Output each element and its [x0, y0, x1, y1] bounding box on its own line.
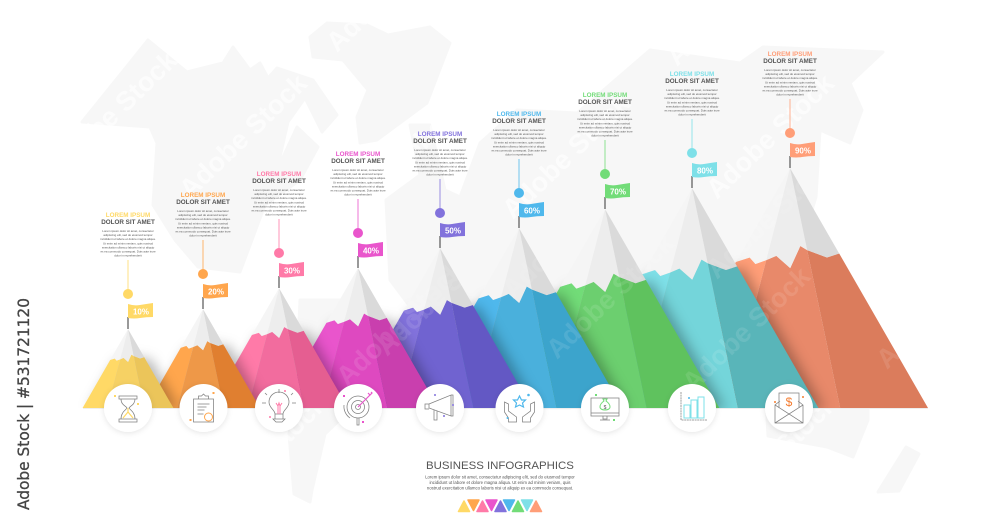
watermarks on background: Adobe Stock [703, 387, 844, 524]
text 60%: incididunt ut labore et dolore magna aliqua. [491, 136, 547, 140]
text 90%: ex ea commodo consequat. Duis aute irure [762, 88, 818, 92]
flag 90%: 90% [795, 146, 811, 156]
pin 70% [600, 140, 610, 179]
text 60%: DOLOR SIT AMET [492, 118, 546, 125]
text 40%: LOREM IPSUM [336, 151, 380, 158]
text 20%: LOREM IPSUM [181, 192, 225, 199]
text 20% [175, 192, 231, 238]
text 90%: Lorem ipsum dolor sit amet, consectetur [764, 68, 816, 72]
text 50%: incididunt ut labore et dolore magna aliqua. [412, 156, 468, 160]
mountain 40% [297, 268, 437, 408]
text 20%: adipiscing elit, sed do eiusmod tempor [178, 213, 228, 217]
faint watermarks over mountains: Adobe Stock [330, 254, 471, 391]
step 10% [100, 212, 156, 329]
watermarks on background: Adobe Stock [43, 44, 184, 181]
text 80%: incididunt ut labore et dolore magna aliqua. [664, 96, 720, 100]
text 70%: LOREM IPSUM [583, 92, 627, 99]
faint watermarks over mountains: Adobe Stock [700, 147, 841, 284]
flag 20%: 20% [208, 288, 224, 296]
step 30% [251, 171, 307, 288]
text 20%: dolor in reprehenderit [189, 234, 217, 238]
text 30%: Lorem ipsum dolor sit amet, consectetur [253, 188, 305, 192]
text 50%: Lorem ipsum dolor sit amet, consectetur [414, 148, 466, 152]
text 20%: DOLOR SIT AMET [176, 199, 230, 206]
text 50%: DOLOR SIT AMET [413, 138, 467, 145]
text 90%: exercitation ullamco laboris nisi ut aliquip [764, 84, 817, 88]
text 70%: Lorem ipsum dolor sit amet, consectetur [579, 109, 631, 113]
mountain 60% [458, 228, 630, 408]
text 40%: incididunt ut labore et dolore magna aliqua. [330, 176, 386, 180]
text 10%: ex ea commodo consequat. Duis aute irure [100, 250, 156, 254]
text 50%: ex ea commodo consequat. Duis aute irure [412, 168, 468, 172]
icon: envelope with dollar [765, 384, 813, 432]
text 40%: dolor in reprehenderit [344, 193, 372, 197]
text 70%: adipiscing elit, sed do eiusmod tempor [580, 113, 630, 117]
text 80%: Ut enim ad minim veniam, quis nostrud [667, 100, 717, 104]
text 40% [330, 151, 386, 197]
pin 80% [687, 119, 697, 158]
text 30%: DOLOR SIT AMET [252, 178, 306, 185]
text 70%: DOLOR SIT AMET [578, 99, 632, 106]
faint watermarks over mountains: Adobe Stock [540, 227, 681, 364]
mountain 20% [146, 309, 260, 408]
description: Lorem ipsum dolor sit amet, consectetur adipiscing elit, sed do eiusmod tempor [425, 474, 575, 480]
text 40%: ex ea commodo consequat. Duis aute irure [330, 188, 386, 192]
watermarks on background: Adobe Stock [370, 54, 511, 191]
text 10%: incididunt ut labore et dolore magna aliqua. [100, 237, 156, 241]
faint watermarks over mountains: Adobe Stock [206, 214, 347, 351]
text 20%: Ut enim ad minim veniam, quis nostrud [178, 221, 228, 225]
flag 70%: 70% [610, 188, 626, 196]
text 20%: incididunt ut labore et dolore magna aliqua. [175, 217, 231, 221]
pin 90% [785, 99, 795, 138]
text 30%: ex ea commodo consequat. Duis aute irure [251, 208, 307, 212]
text 90%: Ut enim ad minim veniam, quis nostrud [765, 80, 815, 84]
text 80%: adipiscing elit, sed do eiusmod tempor [667, 92, 717, 96]
mountain 10% [83, 329, 173, 408]
mountain 80% [625, 188, 827, 408]
pin 10% [123, 260, 133, 299]
pin 40% [353, 199, 363, 238]
icon: megaphone [416, 384, 464, 432]
title: BUSINESS INFOGRAPHICS [426, 460, 574, 472]
text 40%: exercitation ullamco laboris nisi ut aliquip [332, 184, 385, 188]
text 30%: LOREM IPSUM [257, 171, 301, 178]
text 60%: LOREM IPSUM [497, 111, 541, 118]
text 40%: DOLOR SIT AMET [331, 158, 385, 165]
text 80%: exercitation ullamco laboris nisi ut aliquip [666, 104, 719, 108]
pin 50% [435, 179, 445, 218]
text 20%: ex ea commodo consequat. Duis aute irure [175, 230, 231, 234]
text 30%: exercitation ullamco laboris nisi ut aliquip [253, 204, 306, 208]
text 20%: Lorem ipsum dolor sit amet, consectetur [177, 209, 229, 213]
text 90% [762, 51, 818, 97]
text 60%: exercitation ullamco laboris nisi ut aliquip [493, 144, 546, 148]
text 30%: dolor in reprehenderit [265, 213, 293, 217]
text 70%: dolor in reprehenderit [591, 134, 619, 138]
pin 60% [514, 159, 524, 198]
icon: monitor with money bag [581, 384, 629, 432]
triangle row [458, 500, 542, 512]
mountain 30% [235, 288, 348, 408]
description: nostrud exercitation ullamco laboris nisi ut aliquip ex ea commodo consequat. [427, 486, 573, 490]
text 50%: adipiscing elit, sed do eiusmod tempor [415, 152, 465, 156]
text 50% [412, 131, 468, 177]
icon: envelope with dollar: $ [786, 395, 793, 409]
text 70%: incididunt ut labore et dolore magna aliqua. [577, 117, 633, 121]
watermarks on background: Adobe Stock [193, 387, 334, 524]
text 50%: exercitation ullamco laboris nisi ut aliquip [414, 164, 467, 168]
text 70%: exercitation ullamco laboris nisi ut aliquip [579, 125, 632, 129]
flag 50%: 50% [445, 226, 461, 236]
faint watermarks over mountains [222, 264, 899, 386]
flag 10%: 10% [133, 308, 149, 316]
text 60%: adipiscing elit, sed do eiusmod tempor [494, 132, 544, 136]
text 80%: Lorem ipsum dolor sit amet, consectetur [666, 88, 718, 92]
mountain 70% [539, 210, 728, 408]
faint watermarks over mountains: Adobe Stock [676, 260, 817, 397]
step 50% [412, 131, 468, 248]
watermarks on background: Adobe Stock [173, 67, 314, 204]
text 40%: Lorem ipsum dolor sit amet, consectetur [332, 168, 384, 172]
world map background [82, 23, 919, 502]
text 10%: Lorem ipsum dolor sit amet, consectetur [102, 229, 154, 233]
watermarks on background: Adobe Stock [496, 87, 637, 224]
text 10%: LOREM IPSUM [106, 212, 150, 219]
text 60%: dolor in reprehenderit [505, 153, 533, 157]
flag 40%: 40% [363, 246, 379, 256]
text 90%: dolor in reprehenderit [776, 93, 804, 97]
text 70%: Ut enim ad minim veniam, quis nostrud [580, 121, 630, 125]
text 50%: Ut enim ad minim veniam, quis nostrud [415, 160, 465, 164]
mountain 50% [376, 248, 533, 408]
step 80% [664, 71, 720, 188]
text 60%: ex ea commodo consequat. Duis aute irure [491, 148, 547, 152]
text 70% [577, 92, 633, 138]
text 60%: Ut enim ad minim veniam, quis nostrud [494, 140, 544, 144]
text 40%: adipiscing elit, sed do eiusmod tempor [333, 172, 383, 176]
text 90%: LOREM IPSUM [768, 51, 812, 58]
text 50%: dolor in reprehenderit [426, 173, 454, 177]
mountain 90% [715, 168, 928, 408]
text 40%: Ut enim ad minim veniam, quis nostrud [333, 180, 383, 184]
text 90%: incididunt ut labore et dolore magna aliqua. [762, 76, 818, 80]
step 70% [577, 92, 633, 209]
text 60% [491, 111, 547, 157]
text 80% [664, 71, 720, 117]
text 80%: DOLOR SIT AMET [665, 78, 719, 85]
faint watermarks over mountains: Adobe Stock [370, 224, 511, 361]
text 10% [100, 212, 156, 258]
pin 30% [274, 219, 284, 258]
text 10%: Ut enim ad minim veniam, quis nostrud [103, 241, 153, 245]
flag 80%: 80% [697, 166, 713, 176]
text 80%: dolor in reprehenderit [678, 113, 706, 117]
watermarks on background: Adobe Stock [830, 94, 971, 231]
mountains chart [83, 168, 928, 408]
text 30%: adipiscing elit, sed do eiusmod tempor [254, 192, 304, 196]
text 30% [251, 171, 307, 217]
step 40% [330, 151, 386, 268]
text 90%: DOLOR SIT AMET [763, 58, 817, 65]
text 20%: exercitation ullamco laboris nisi ut aliquip [177, 225, 230, 229]
icon: hourglass [104, 384, 152, 432]
step 90% [762, 51, 818, 168]
text 30%: Ut enim ad minim veniam, quis nostrud [254, 200, 304, 204]
icon: light bulb [255, 384, 303, 432]
text 10%: exercitation ullamco laboris nisi ut aliquip [102, 245, 155, 249]
flag 30%: 30% [284, 266, 300, 276]
icon: monitor with money bag: $ [604, 405, 607, 411]
icon: clipboard [180, 384, 228, 432]
icon: bar chart [668, 384, 716, 432]
step 20% [175, 192, 231, 309]
text 50%: LOREM IPSUM [418, 131, 462, 138]
icon: hands with star [496, 384, 544, 432]
text 80%: LOREM IPSUM [670, 71, 714, 78]
text 80%: ex ea commodo consequat. Duis aute irure [664, 108, 720, 112]
description: incididunt ut labore et dolore magna aliqua. Ut enim ad minim veniam, quis [429, 480, 571, 485]
text 10%: adipiscing elit, sed do eiusmod tempor [103, 233, 153, 237]
text 60%: Lorem ipsum dolor sit amet, consectetur [493, 128, 545, 132]
text 10%: DOLOR SIT AMET [101, 219, 155, 226]
faint watermarks over mountains: Adobe Stock [63, 187, 204, 324]
text 10%: dolor in reprehenderit [114, 254, 142, 258]
flag 60%: 60% [524, 206, 540, 216]
text 90%: adipiscing elit, sed do eiusmod tempor [765, 72, 815, 76]
text 70%: ex ea commodo consequat. Duis aute irure [577, 130, 633, 134]
stock id side label: Adobe Stock | #531721120 [14, 298, 33, 510]
icon: target [334, 384, 382, 432]
text 30%: incididunt ut labore et dolore magna aliqua. [251, 196, 307, 200]
pin 20% [198, 240, 208, 279]
faint watermarks over mountains: Adobe Stock [496, 167, 637, 304]
watermarks on background: Adobe Stock [700, 67, 841, 204]
step 60% [491, 111, 547, 228]
